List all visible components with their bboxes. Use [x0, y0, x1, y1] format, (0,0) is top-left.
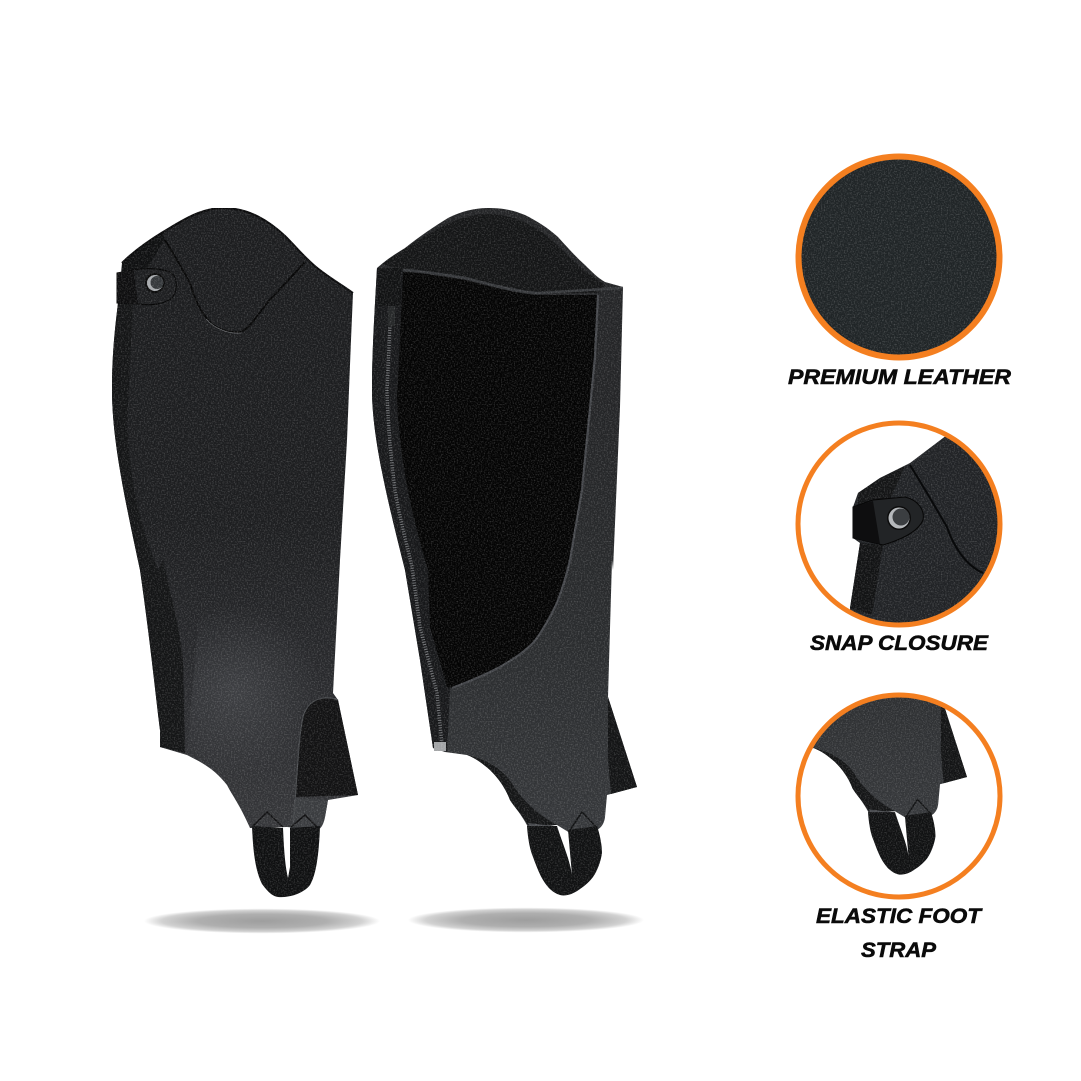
- detail circle: leather texture: [798, 156, 1000, 358]
- detail circle: snap close-up: [798, 423, 1000, 625]
- shadow: left chap: [144, 908, 380, 934]
- detail circle: strap close-up: [796, 692, 1002, 900]
- feature: premium leather: [788, 156, 1012, 389]
- label: snap closure: SNAP CLOSURE: [810, 632, 989, 655]
- label: elastic foot strap: ELASTIC FOOT: [816, 905, 983, 928]
- shadow: right chap: [408, 908, 644, 932]
- product: right half chap, inner suede side: [372, 208, 637, 895]
- feature: snap closure: [798, 423, 1000, 655]
- product: left half chap, outer side: [112, 208, 358, 897]
- label: elastic foot strap: [816, 905, 983, 962]
- feature: elastic foot strap: [796, 692, 1002, 958]
- label: elastic foot strap: STRAP: [861, 939, 937, 962]
- label: premium leather: PREMIUM LEATHER: [788, 366, 1012, 389]
